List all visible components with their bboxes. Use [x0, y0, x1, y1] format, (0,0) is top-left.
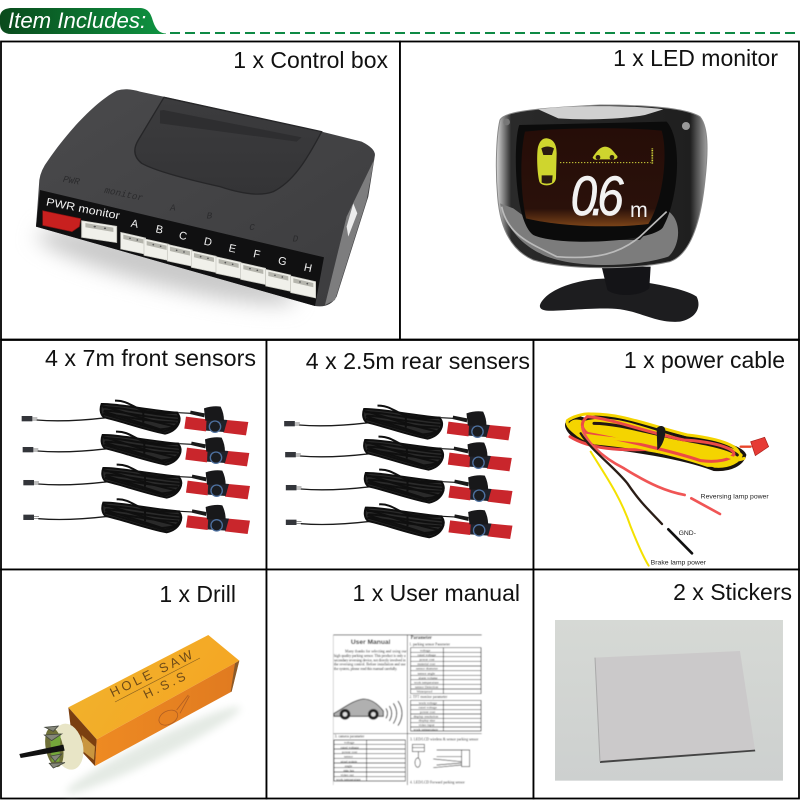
- icon: manual sheet: Parameter: [411, 636, 432, 641]
- wire labels: Brake lamp power: [651, 560, 707, 567]
- embossed labels: [62, 174, 299, 245]
- embossed labels: B: [207, 210, 213, 221]
- camera table: power cost: [342, 750, 357, 754]
- camera table: [334, 740, 405, 781]
- camera table: rated voltage: [341, 745, 359, 749]
- camera table: work temperature: [336, 777, 361, 781]
- parameter table: material cost: [417, 662, 435, 666]
- port labels: F: [252, 248, 261, 261]
- camera table: min lux: [343, 768, 354, 772]
- monitor table: work temperature: [413, 727, 438, 731]
- label: control box: 1 x Control box: [233, 47, 388, 73]
- monitor table: work voltage: [419, 701, 437, 705]
- port labels: [45, 196, 313, 275]
- monitor table: display resolution: [413, 714, 438, 718]
- port labels: D: [203, 236, 213, 249]
- parameter table: [411, 648, 481, 694]
- icon: manual sheet: 4. LED/LCD Forward parking sensor: [410, 780, 466, 784]
- distance reading: [571, 165, 648, 228]
- small yellow car: [593, 147, 617, 160]
- icon: LED monitor: [496, 105, 707, 322]
- icon: manual sheet: the system, please read this manual carefully.: [334, 667, 397, 672]
- parameter table: Waterproof: [417, 690, 433, 694]
- embossed labels: C: [249, 222, 255, 233]
- label: front sensors: 4 x 7m front sensors: [45, 345, 256, 371]
- icon: rear sensor set: [284, 406, 512, 539]
- label: user manual: 1 x User manual: [353, 580, 520, 606]
- label: stickers: 2 x Stickers: [673, 579, 792, 605]
- port: monitor: [82, 221, 117, 243]
- parameter table: sensor diameter: [416, 667, 439, 671]
- wire labels: [651, 494, 770, 567]
- camera table: angle: [345, 764, 353, 768]
- saw cylinder: [42, 721, 88, 773]
- icon: manual sheet: the reversing control. Before installation and use: [334, 663, 406, 667]
- icon: manual sheet: 3. LED/LCD wireless & sensor parking sensor: [410, 738, 479, 742]
- port labels: H: [303, 262, 313, 275]
- label: power cable: 1 x power cable: [624, 347, 785, 373]
- parameter table: alarm volume: [418, 676, 438, 680]
- embossed labels: monitor: [103, 185, 144, 204]
- icon: manual sheet: high quality parking sensor. This product is only a: [334, 654, 406, 658]
- monitor table: display size: [419, 719, 435, 723]
- monitor table: power cost: [420, 710, 435, 714]
- port: power red: [43, 211, 81, 232]
- panel: front sensors: [1, 340, 266, 570]
- parameter table: voltage: [420, 648, 431, 652]
- car illustration: [334, 699, 402, 726]
- panel: drill: [1, 570, 266, 800]
- icon: manual sheet: Many thanks for selecting and using our: [345, 650, 407, 654]
- icon: front sensor set: [22, 401, 250, 534]
- header: item includes: [0, 8, 800, 34]
- drill bit: [19, 745, 65, 758]
- port labels: C: [178, 230, 188, 243]
- camera table: sensor: [344, 755, 354, 759]
- panel: user manual: [266, 570, 534, 798]
- label: LED monitor: 1 x LED monitor: [613, 45, 778, 71]
- panel: LED monitor: [400, 42, 799, 340]
- wire labels: Reversing lamp power: [701, 494, 770, 501]
- box print: H.S.S: [141, 669, 188, 702]
- wiring diagram: [412, 744, 470, 768]
- panel: control box: [1, 42, 400, 340]
- embossed labels: D: [293, 234, 299, 245]
- red plug: [751, 437, 769, 456]
- ports A to H: [121, 232, 316, 298]
- camera table: voltage: [344, 741, 355, 745]
- parameter table: rated voltage: [418, 653, 436, 657]
- monitor table: video input: [419, 723, 434, 727]
- distance reading: m: [630, 198, 648, 222]
- icon: manual sheet: 3. camera parameter: [335, 735, 365, 739]
- monitor table: rated voltage: [419, 706, 437, 710]
- icon: power cable: [567, 414, 770, 567]
- parameter table: sensor angle: [418, 671, 435, 675]
- label: rear sensors: 4 x 2.5m rear sensers: [306, 348, 530, 374]
- icon: manual sheet: User Manual: [351, 639, 391, 646]
- embossed labels: PWR: [62, 174, 81, 188]
- port labels: PWR monitor: [45, 196, 121, 222]
- monitor table: [411, 700, 481, 731]
- camera table: video out: [341, 773, 354, 777]
- label: drill: 1 x Drill: [159, 581, 236, 607]
- parameter table: work temperature: [414, 680, 439, 684]
- yellow car top view: [537, 138, 557, 185]
- icon: hole saw drill: [19, 635, 245, 800]
- box print: HOLE SAW: [107, 647, 196, 700]
- parameter table: sensor Detection: [415, 685, 439, 689]
- parameter table: power cost: [419, 657, 435, 661]
- icon: manual sheet: 2. TFT monitor parameter: [409, 695, 448, 699]
- panel: power cable: [534, 340, 799, 570]
- stand: [540, 267, 698, 322]
- port labels: B: [154, 223, 164, 237]
- distance reading: 0.6: [571, 165, 624, 228]
- icon: manual sheet: secondary reversing device, not directly involved in: [334, 658, 406, 663]
- port labels: A: [130, 218, 140, 231]
- port labels: G: [277, 255, 288, 268]
- icon: manual sheet: 1. parking sensor Parameter: [409, 642, 451, 646]
- camera table: pixel points: [341, 759, 358, 763]
- wire labels: GND-: [679, 530, 696, 537]
- embossed labels: A: [169, 203, 176, 214]
- icon: manual sheet: [333, 635, 482, 785]
- screen housing: [496, 105, 707, 268]
- icon: sticker sheet: [555, 620, 783, 781]
- panel: rear sensors: [266, 340, 534, 570]
- panel: stickers: [534, 570, 799, 798]
- cable tie: [657, 426, 665, 450]
- port labels: E: [227, 242, 237, 256]
- heading tab: Item Includes:: [8, 8, 146, 33]
- icon: control box: [32, 89, 375, 318]
